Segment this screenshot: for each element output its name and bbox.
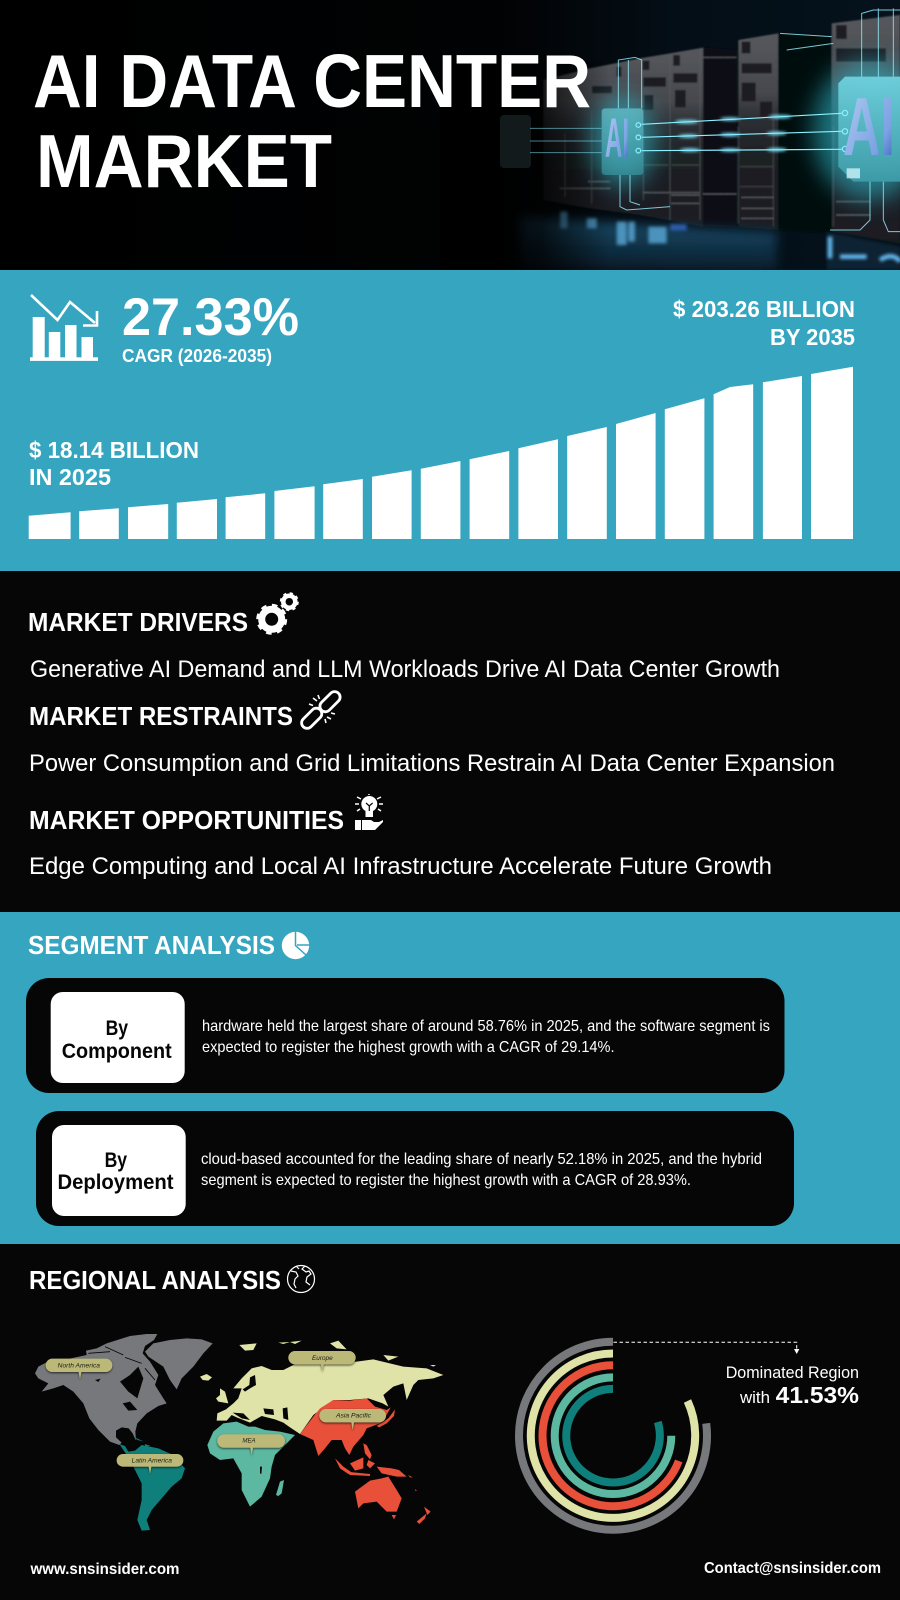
- footer: contact email: Contact@snsinsider.com: [704, 1560, 881, 1577]
- footer: website: www.snsinsider.com: [30, 1561, 179, 1578]
- text: component detail: expected to register the highest growth with a CAGR of 29.14%.: [202, 1039, 614, 1056]
- heading: regional analysis: REGIONAL ANALYSIS: [29, 1265, 281, 1295]
- title: AI DATA CENTER: [33, 39, 591, 123]
- panel: market drivers, restraints, opportunities: [0, 571, 900, 912]
- callout: dominated region share: with: [739, 1388, 770, 1407]
- text: component detail: [202, 1018, 770, 1056]
- 2035 market value: $ 203.26 BILLION: [673, 296, 855, 322]
- 2035 market value: [673, 296, 855, 350]
- label box: by component: [51, 992, 185, 1083]
- panel: regional analysis: [0, 1244, 900, 1600]
- text: deployment detail: cloud-based accounted for the leading share of nearly 52.18% in 2025, and the hybrid: [201, 1151, 762, 1168]
- card: by component: [26, 978, 784, 1093]
- image: data center racks with AI chips: AI: [605, 106, 629, 169]
- region: Latin America: [119, 1437, 185, 1531]
- map west: the Americas: [35, 1334, 213, 1531]
- island: Iceland: [200, 1374, 212, 1381]
- callout: Asia Pacific: Asia Pacific: [335, 1413, 372, 1420]
- label box: by deployment: By: [105, 1149, 127, 1172]
- label box: by component: Component: [62, 1040, 172, 1063]
- callout: North America: North America: [58, 1363, 100, 1370]
- 2025 market value: [29, 437, 199, 490]
- callout: Asia Pacific: [319, 1409, 386, 1430]
- label box: by component: By: [106, 1017, 128, 1040]
- callout: dominated region share: [726, 1363, 859, 1408]
- callout: Europe: [288, 1351, 356, 1372]
- callout: North America: [46, 1359, 112, 1379]
- panel: market size and CAGR: [0, 270, 900, 571]
- region: Middle East and Africa: [207, 1422, 295, 1507]
- map east: Europe, Africa, Asia and Oceania: [207, 1341, 443, 1524]
- 2035 market value: BY 2035: [770, 324, 855, 350]
- panel: hero banner: [0, 0, 900, 270]
- region: North America: [35, 1334, 213, 1445]
- region: Asia Pacific: [300, 1398, 431, 1524]
- region: Europe and Russia: [216, 1341, 443, 1434]
- text: component detail: hardware held the largest share of around 58.76% in 2025, and the software segment is: [202, 1018, 770, 1035]
- icon: hand holding light bulb: [355, 794, 383, 830]
- 2025 market value: $ 18.14 BILLION: [29, 437, 199, 463]
- heading: market restraints: MARKET RESTRAINTS: [29, 701, 293, 731]
- text: restraint statement: Power Consumption and Grid Limitations Restrain AI Data Center Expansion: [29, 750, 835, 777]
- icon: gears: [258, 594, 297, 633]
- callout: dominated region share: 41.53%: [776, 1382, 859, 1408]
- title: MARKET: [36, 119, 332, 203]
- callout: Latin America: [117, 1454, 183, 1474]
- heading: market opportunities: MARKET OPPORTUNITIES: [29, 805, 344, 835]
- icon: globe: [288, 1266, 314, 1292]
- text: opportunity statement: Edge Computing and Local AI Infrastructure Accelerate Future Growth: [29, 853, 772, 880]
- icon: chart with trend arrow: [30, 295, 98, 361]
- CAGR label: CAGR (2026-2035): [122, 346, 272, 366]
- heading: segment analysis: SEGMENT ANALYSIS: [28, 930, 275, 960]
- icon: pie chart: [282, 931, 310, 959]
- card: by deployment: [36, 1111, 794, 1226]
- label box: by deployment: [52, 1125, 186, 1216]
- arrow: dashed leader to dominated region: [614, 1342, 799, 1354]
- callout: Europe: Europe: [312, 1355, 333, 1362]
- callout: Latin America: Latin America: [132, 1458, 172, 1465]
- label box: by deployment: Deployment: [58, 1171, 174, 1194]
- chart: regional share radial bars: [519, 1342, 707, 1530]
- image: data center racks with AI chips: [440, 8, 900, 270]
- icon: broken chain link: [299, 689, 342, 731]
- text: deployment detail: segment is expected to register the highest growth with a CAGR of 28.93%.: [201, 1172, 691, 1189]
- heading: market drivers: MARKET DRIVERS: [28, 607, 248, 637]
- callout: MEA: MEA: [242, 1438, 256, 1445]
- callout: dominated region share: Dominated Region: [726, 1363, 859, 1382]
- text: deployment detail: [201, 1151, 762, 1189]
- text: driver statement: Generative AI Demand and LLM Workloads Drive AI Data Center Growth: [30, 656, 780, 683]
- callout: MEA: [217, 1434, 285, 1455]
- title: [33, 39, 591, 203]
- map: world regions: [35, 1334, 443, 1531]
- 2025 market value: IN 2025: [29, 464, 111, 490]
- bar chart: market growth: [29, 367, 853, 539]
- panel: segment analysis: [0, 912, 900, 1244]
- CAGR value: 27.33%: [122, 288, 299, 347]
